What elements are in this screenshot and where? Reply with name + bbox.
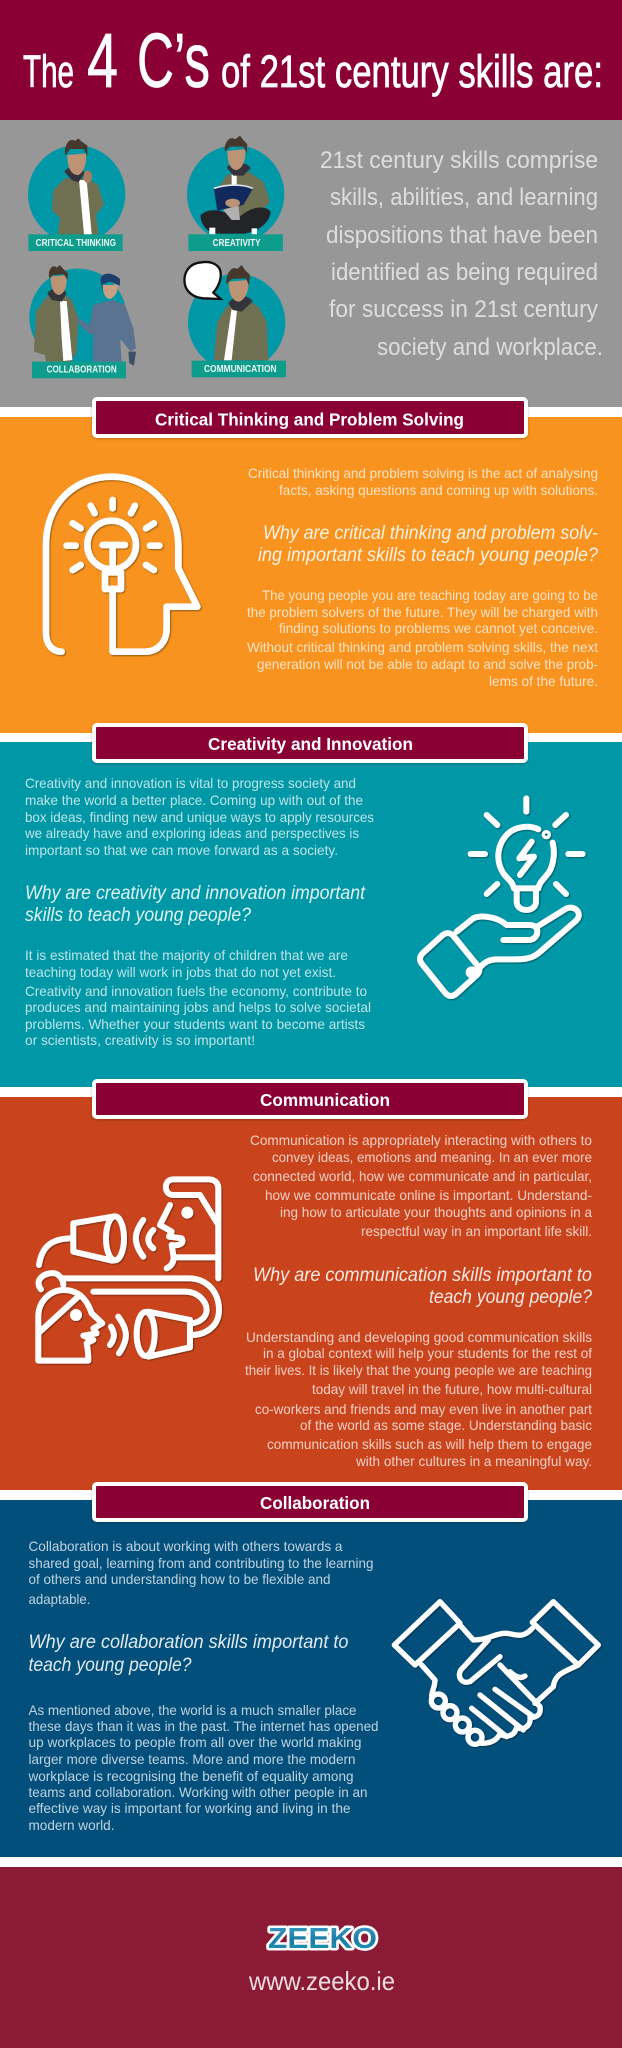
text block: communication answer: in a global context will help your students for the rest of [263, 1345, 592, 1361]
banner: collaboration: Collaboration [260, 1493, 370, 1513]
text block: communication answer: co-workers and friends and may even live in another part [255, 1401, 592, 1417]
question: creativity: skills to teach young people? [25, 905, 251, 926]
panel: communication [0, 1097, 622, 1490]
question: critical thinking: Why are critical thinking and problem solv- [263, 523, 598, 544]
text block: communication intro: ing how to articulate your thoughts and opinions in a [280, 1204, 592, 1220]
text block: communication answer: communication skills such as will help them to engage [267, 1436, 592, 1452]
text block: critical thinking intro [248, 465, 598, 498]
banner: creativity: Creativity and Innovation [208, 734, 413, 754]
text block: critical thinking intro: facts, asking questions and coming up with solutions. [279, 482, 598, 498]
text block: collaboration answer: larger more diverse teams. More and more the modern [28, 1751, 356, 1767]
question: communication: Why are communication skills important to [253, 1265, 592, 1286]
text block: creativity intro: important so that we can move forward as a society. [25, 842, 338, 858]
intro text [320, 147, 603, 361]
character: communication with speech bubble [184, 262, 286, 377]
text block: creativity answer [25, 947, 371, 1048]
text block: communication answer: Understanding and developing good communication skills [246, 1329, 592, 1345]
banner: critical thinking [94, 399, 526, 436]
characters illustration [28, 136, 286, 378]
website url: www.zeeko.ie [248, 1966, 395, 1996]
text block: critical thinking answer: generation will not be able to adapt to and solve the prob- [257, 656, 598, 672]
intro text: 21st century skills comprise [320, 147, 598, 174]
text block: creativity answer: produces and maintaining jobs and helps to solve societal [25, 999, 371, 1015]
text block: critical thinking answer: the problem solvers of the future. They will be charged with [247, 604, 598, 620]
question: communication [253, 1265, 592, 1308]
title: C’s [137, 18, 210, 104]
text block: critical thinking answer: Without critical thinking and problem solving skills, the next [247, 639, 598, 655]
banner: collaboration [94, 1484, 526, 1520]
icon: two people talking through cups [38, 1179, 219, 1361]
title: The [23, 46, 74, 97]
text block: creativity answer: Creativity and innovation fuels the economy, contribute to [25, 983, 367, 999]
text block: communication intro: connected world, how we communicate and in particular, [253, 1168, 592, 1184]
text block: collaboration intro: of others and understanding how to be flexible and [28, 1571, 330, 1587]
panel: critical thinking [0, 417, 622, 733]
text block: communication intro: how we communicate online is important. Understand- [265, 1187, 592, 1203]
icon: handshake [394, 1602, 598, 1744]
text block: communication answer: today will travel in the future, how multi-cultural [312, 1381, 592, 1397]
banner: critical thinking: Critical Thinking and Problem Solving [155, 410, 464, 430]
text block: collaboration answer: modern world. [28, 1817, 114, 1833]
text block: creativity intro: we already have and exploring ideas and perspectives is [24, 825, 359, 841]
text block: communication intro: respectful way in an important life skill. [361, 1223, 592, 1239]
character: critical thinking: CRITICAL THINKING [36, 238, 116, 249]
banner: communication: Communication [260, 1090, 390, 1110]
text block: critical thinking intro: Critical thinking and problem solving is the act of analysing [248, 465, 598, 481]
character: collaboration: COLLABORATION [47, 365, 117, 376]
header panel [0, 0, 622, 120]
text block: collaboration intro: Collaboration is about working with others towards a [28, 1538, 343, 1554]
banner: creativity [94, 725, 526, 761]
text block: collaboration intro [28, 1538, 374, 1607]
text block: collaboration answer: teams and collaboration. Working with other people in an [28, 1784, 368, 1800]
banner: communication [94, 1081, 526, 1117]
text block: collaboration answer: workplace is recognising the benefit of equality among [28, 1768, 353, 1784]
panel: creativity [0, 742, 622, 1087]
question: collaboration [28, 1632, 348, 1676]
text block: creativity intro: box ideas, finding new and unique ways to apply resources [25, 809, 374, 825]
text block: communication intro [250, 1132, 592, 1239]
text block: communication answer: of the world as some stage. Understanding basic [300, 1417, 592, 1433]
text block: collaboration answer: these days than it was in the past. The internet has opened [28, 1718, 378, 1734]
icon: head with light bulb [46, 477, 197, 652]
intro text: skills, abilities, and learning [330, 184, 598, 211]
question: collaboration: teach young people? [28, 1655, 192, 1676]
title [23, 18, 603, 104]
intro text: identified as being required [331, 259, 598, 286]
intro text: society and workplace. [377, 334, 603, 361]
footer panel [0, 1867, 622, 2048]
text block: creativity intro: Creativity and innovation is vital to progress society and [25, 775, 356, 791]
text block: creativity answer: or scientists, creativity is so important! [25, 1032, 255, 1048]
question: creativity [25, 883, 366, 926]
logo: Zeeko: ZEEKO [268, 1923, 377, 1955]
panel: collaboration [0, 1500, 622, 1857]
text block: creativity intro [24, 775, 374, 858]
text block: communication intro: Communication is appropriately interacting with others to [250, 1132, 592, 1148]
text block: communication answer [245, 1329, 592, 1469]
question: creativity: Why are creativity and innovation important [25, 883, 366, 904]
title: 4 [87, 18, 118, 104]
character: creativity: CREATIVITY [213, 238, 261, 249]
character: communication with speech bubble: COMMUNICATION [204, 364, 277, 375]
text block: critical thinking answer: finding solutions to problems we cannot yet conceive. [279, 620, 598, 636]
text block: critical thinking answer [247, 587, 598, 689]
question: critical thinking: ing important skills to teach young people? [258, 545, 598, 566]
intro text: for success in 21st century [329, 296, 599, 323]
text block: collaboration intro: shared goal, learning from and contributing to the learning [28, 1555, 374, 1571]
text block: collaboration answer: effective way is important for working and living in the [28, 1800, 351, 1816]
text block: creativity intro: make the world a better place. Coming up with out of the [25, 792, 363, 808]
text block: critical thinking answer: lems of the future. [489, 673, 598, 689]
text block: communication answer: with other cultures in a meaningful way. [355, 1453, 592, 1469]
question: communication: teach young people? [429, 1287, 592, 1308]
icon: hand holding light bulb [420, 798, 583, 996]
text block: creativity answer: teaching today will work in jobs that do not yet exist. [25, 964, 336, 980]
text block: collaboration intro: adaptable. [28, 1591, 90, 1607]
text block: collaboration answer [28, 1702, 378, 1833]
question: collaboration: Why are collaboration skills important to [28, 1632, 348, 1653]
panel: intro grey [0, 120, 622, 407]
text block: creativity answer: problems. Whether your students want to become artists [25, 1016, 365, 1032]
intro text: dispositions that have been [326, 222, 598, 249]
character: creativity [187, 136, 284, 251]
text block: communication intro: convey ideas, emotions and meaning. In an ever more [272, 1149, 592, 1165]
text block: communication answer: their lives. It is likely that the young people we are teaching [245, 1362, 592, 1378]
text block: creativity answer: It is estimated that the majority of children that we are [25, 947, 348, 963]
text block: collaboration answer: As mentioned above, the world is a much smaller place [28, 1702, 357, 1718]
text block: critical thinking answer: The young people you are teaching today are going to be [262, 587, 598, 603]
question: critical thinking [258, 523, 598, 566]
text block: collaboration answer: up workplaces to people from all over the world making [28, 1734, 362, 1750]
character: critical thinking [28, 138, 125, 251]
character: collaboration [29, 265, 136, 378]
